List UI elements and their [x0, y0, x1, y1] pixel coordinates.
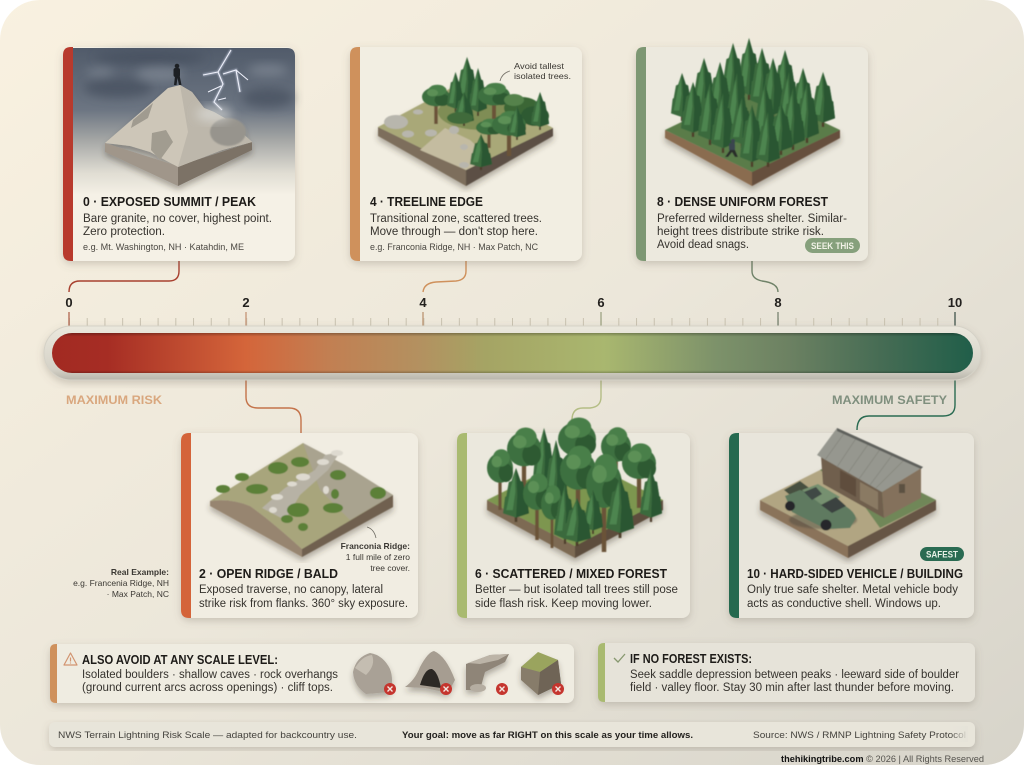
illustration: mixed forest	[487, 417, 663, 558]
heading: IF NO FOREST EXISTS:	[630, 651, 752, 666]
card background	[729, 433, 974, 618]
description: acts as conductive shell. Windows up.	[747, 598, 941, 610]
accent bar: light green	[457, 433, 467, 618]
heading: 0 · EXPOSED SUMMIT / PEAK	[83, 194, 257, 209]
panel: level 4 treeline edge	[350, 47, 582, 261]
description: Zero protection.	[83, 226, 165, 238]
panel: if no forest exists	[598, 643, 975, 702]
heading: 4 · TREELINE EDGE	[370, 194, 483, 209]
accent bar: dark green	[729, 433, 739, 618]
side note: real example: e.g. Francenia Ridge, NH	[73, 578, 169, 588]
panel: level 2 open ridge	[181, 433, 418, 618]
heading: 8 · DENSE UNIFORM FOREST	[657, 194, 828, 209]
description: Transitional zone, scattered trees.	[370, 213, 542, 225]
timeline connectors	[69, 261, 955, 433]
footer strip	[49, 722, 975, 747]
description: side flash risk. Keep moving lower.	[475, 598, 652, 610]
icon: check mark	[614, 654, 625, 662]
description: Bare granite, no cover, highest point.	[83, 213, 272, 225]
callout: Franconia Ridge: Franconia Ridge:	[341, 541, 410, 551]
panel: level 0 exposed summit	[63, 47, 295, 261]
callout: Franconia Ridge	[341, 527, 410, 573]
building	[817, 428, 923, 518]
description	[370, 213, 542, 238]
description: height trees distribute strike risk.	[657, 226, 824, 238]
description	[657, 213, 847, 251]
panel: level 10 vehicle or building	[729, 428, 974, 618]
mist around the summit	[196, 106, 232, 122]
description	[82, 669, 338, 694]
description: (ground current arcs across openings) · cliff tops.	[82, 682, 333, 694]
callout: Franconia Ridge: 1 full mile of zero	[346, 552, 410, 562]
heading: 6 · SCATTERED / MIXED FOREST	[475, 566, 667, 581]
badge: safest	[920, 547, 964, 561]
description: Only true safe shelter. Metal vehicle body	[747, 584, 958, 596]
illustration: mountain	[105, 85, 252, 186]
description	[630, 669, 959, 694]
example locations: e.g. Mt. Washington, NH · Katahdin, ME	[83, 242, 244, 253]
side note: real example: Real Example:	[111, 567, 169, 577]
scale numbers: 10	[948, 295, 962, 310]
lightning bolt	[203, 50, 248, 110]
description	[199, 584, 408, 610]
accent bar: orange	[350, 47, 360, 261]
accent bar: red	[63, 47, 73, 261]
accent bar: sage	[636, 47, 646, 261]
icon: cliff top	[521, 652, 564, 695]
description: Move through — don't stop here.	[370, 226, 538, 238]
panel: level 8 dense forest	[636, 38, 868, 261]
example locations: e.g. Franconia Ridge, NH · Max Patch, NC	[370, 242, 538, 253]
scale numbers: 2	[242, 295, 250, 310]
illustration: stormy sky	[73, 48, 295, 195]
icon: boulder	[353, 653, 396, 695]
description	[747, 584, 958, 610]
badge: seek this: SEEK THIS	[811, 241, 854, 251]
panel background	[50, 644, 574, 703]
scale numbers: 0	[65, 295, 73, 310]
scale numbers: 6	[597, 295, 605, 310]
icon: warning triangle	[64, 653, 77, 665]
description: Exposed traverse, no canopy, lateral	[199, 584, 383, 596]
footer note: goal: Your goal: move as far RIGHT on this scale as your time allows.	[402, 730, 693, 741]
badge: safest: SAFEST	[926, 550, 958, 560]
callout: avoid tallest trees: isolated trees.	[514, 71, 571, 81]
risk gradient bar	[44, 326, 981, 380]
heading: 10 · HARD-SIDED VEHICLE / BUILDING	[747, 566, 963, 581]
card background	[350, 47, 582, 261]
description: Better — but isolated tall trees still pose	[475, 584, 678, 596]
heading: 2 · OPEN RIDGE / BALD	[199, 566, 338, 581]
scale ticks	[69, 312, 955, 326]
illustration: building and truck	[760, 428, 936, 558]
storm clouds	[84, 52, 294, 108]
callout: Franconia Ridge: tree cover.	[370, 563, 410, 573]
description: Seek saddle depression between peaks · leeward side of boulder	[630, 669, 959, 681]
accent bar: light green	[598, 643, 605, 702]
scale numbers: 8	[774, 295, 782, 310]
illustration: open ridge	[210, 443, 393, 557]
footer note: source: Source: NWS / RMNP Lightning Safety Protocol	[753, 730, 966, 741]
icon: rock overhang	[466, 654, 509, 695]
description	[475, 584, 678, 610]
card background	[636, 47, 868, 261]
illustration: treeline terrain	[378, 57, 553, 186]
label: maximum safety: MAXIMUM SAFETY	[832, 393, 947, 407]
lighter clouds	[86, 64, 288, 81]
illustration: dense forest	[665, 38, 840, 186]
description: field · valley floor. Stay 30 min after last thunder before moving.	[630, 682, 954, 694]
foliage clusters	[447, 94, 549, 126]
description	[83, 213, 272, 238]
card background	[63, 47, 295, 261]
footer note: scale name: NWS Terrain Lightning Risk Scale — adapted for backcountry use.	[58, 730, 357, 741]
callout: avoid tallest trees: Avoid tallest	[514, 61, 565, 71]
pickup truck	[784, 481, 857, 530]
scale numbers	[65, 295, 962, 310]
heading: ALSO AVOID AT ANY SCALE LEVEL:	[82, 652, 278, 667]
panel: also avoid	[50, 644, 574, 703]
description: strike risk from flanks. 360° sky exposure.	[199, 598, 408, 610]
icon: shallow cave	[405, 651, 455, 695]
panel background	[598, 643, 975, 702]
accent bar: orange	[50, 644, 57, 703]
accent bar: burnt orange	[181, 433, 191, 618]
side note: real example: · Max Patch, NC	[107, 589, 169, 599]
description: Preferred wilderness shelter. Similar-	[657, 213, 847, 225]
card background	[457, 433, 690, 618]
side note: real example	[73, 567, 169, 599]
badge: seek this	[805, 238, 860, 253]
callout: avoid tallest trees	[500, 61, 571, 81]
scale numbers: 4	[419, 295, 427, 310]
card background	[181, 433, 418, 618]
description: Isolated boulders · shallow caves · rock overhangs	[82, 669, 338, 681]
small hiker among the trees	[725, 139, 738, 157]
panel: level 6 scattered forest	[457, 417, 690, 618]
description: Avoid dead snags.	[657, 239, 749, 251]
label: maximum risk: MAXIMUM RISK	[66, 393, 162, 407]
watermark credit: thehikingtribe.com © 2026 | All Rights Reserved	[781, 754, 984, 765]
hiker silhouette	[174, 64, 182, 85]
